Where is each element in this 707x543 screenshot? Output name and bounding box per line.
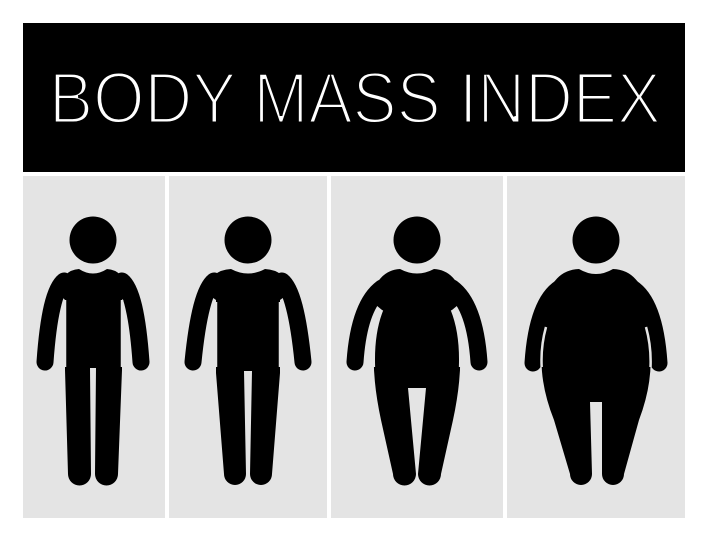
title banner — [23, 23, 685, 172]
panel: underweight — [23, 176, 165, 518]
figure: normal — [193, 216, 303, 485]
figure: slim — [45, 216, 141, 486]
panel: normal — [169, 176, 327, 518]
figure: obese — [533, 216, 659, 485]
panel: obese — [507, 176, 685, 518]
figure: overweight — [355, 216, 479, 486]
panel: overweight — [331, 176, 503, 518]
title: BODY MASS INDEX — [49, 59, 661, 139]
